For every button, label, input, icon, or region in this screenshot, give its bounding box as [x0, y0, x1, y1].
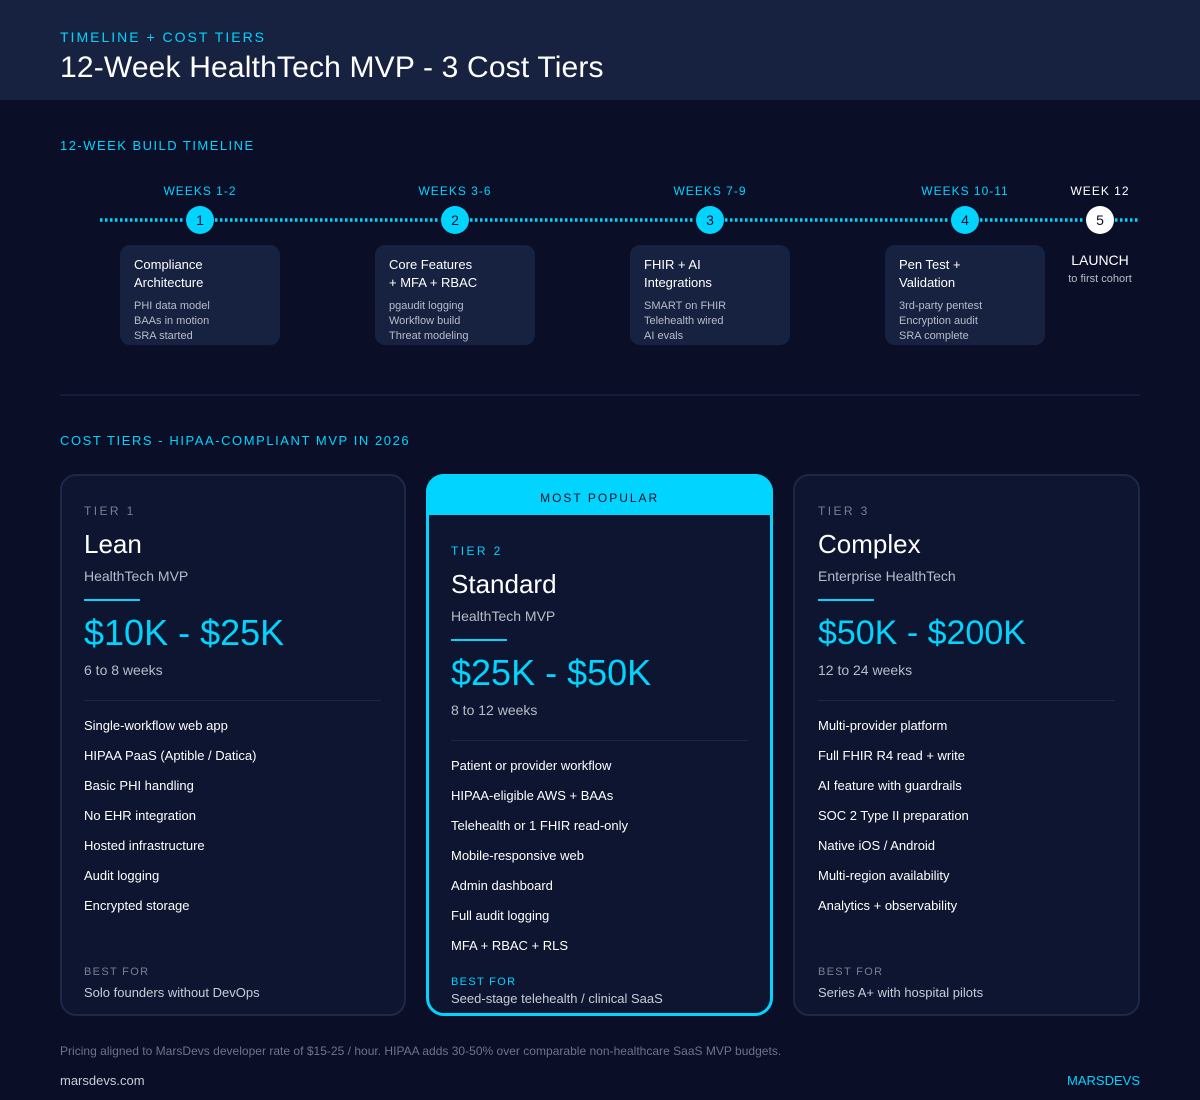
timeline card 3 [630, 245, 790, 345]
node 2: 2 [451, 212, 459, 228]
tier 2 name: Standard [451, 569, 557, 599]
node 2 [441, 206, 469, 234]
node 3: 3 [706, 212, 714, 228]
timeline card 2: Core Features [389, 257, 472, 272]
timeline card 2: pgaudit logging [389, 300, 464, 312]
cost tiers section heading: COST TIERS - HIPAA-COMPLIANT MVP IN 2026 [60, 433, 410, 448]
tier 3 features: SOC 2 Type II preparation [818, 808, 969, 823]
tier 3 features: AI feature with guardrails [818, 778, 962, 793]
timeline card 2: Threat modeling [389, 330, 468, 342]
tier 2 best for [451, 976, 663, 1006]
header eyebrow: TIMELINE + COST TIERS [60, 29, 266, 45]
timeline card 1: Architecture [134, 275, 203, 290]
tier 3 best for [818, 966, 983, 1000]
tier 1 features: Single-workflow web app [84, 718, 228, 733]
tier 3 features: Full FHIR R4 read + write [818, 748, 965, 763]
tier 1 best for [84, 966, 260, 1000]
tier 2 price: $25K - $50K [451, 652, 651, 693]
tier 2 features: HIPAA-eligible AWS + BAAs [451, 788, 613, 803]
footer url: marsdevs.com [60, 1073, 145, 1088]
tier 3 features: Multi-region availability [818, 868, 949, 883]
node 4: 4 [961, 212, 969, 228]
footnote: Pricing aligned to MarsDevs developer rate of $15-25 / hour. HIPAA adds 30-50% over comparable non-healthcare SaaS MVP budgets. [60, 1044, 781, 1058]
panel: tier 2 [426, 474, 773, 1016]
label: weeks 1-2: WEEKS 1-2 [163, 184, 237, 198]
tier 1 features: Hosted infrastructure [84, 838, 205, 853]
timeline card 2: + MFA + RBAC [389, 275, 477, 290]
timeline card 1: PHI data model [134, 300, 210, 312]
tier 2 label: TIER 2 [451, 544, 503, 558]
tier 1 price: $10K - $25K [84, 612, 284, 653]
timeline card 1: BAAs in motion [134, 315, 209, 327]
node 1 [186, 206, 214, 234]
tier 2 features: MFA + RBAC + RLS [451, 938, 568, 953]
tier 2 features: Patient or provider workflow [451, 758, 611, 773]
tier 3 features: Multi-provider platform [818, 718, 947, 733]
tier 2 features: Admin dashboard [451, 878, 553, 893]
timeline: dotted line [100, 218, 1138, 222]
most popular banner: MOST POPULAR [540, 491, 659, 505]
label: weeks 3-6: WEEKS 3-6 [418, 184, 492, 198]
tier 2 best for: BEST FOR [451, 976, 516, 988]
timeline card 3: Telehealth wired [644, 315, 724, 327]
title: 12-Week HealthTech MVP - 3 Cost Tiers [60, 51, 604, 84]
timeline section heading: 12-WEEK BUILD TIMELINE [60, 138, 255, 153]
timeline card 2 [375, 245, 535, 345]
footer brand: MARSDEVS [1067, 1073, 1140, 1088]
tier 3 price: $50K - $200K [818, 614, 1026, 652]
tier 2 duration: 8 to 12 weeks [451, 702, 537, 718]
launch label: LAUNCH [1071, 252, 1129, 268]
tier 1 label: TIER 1 [84, 504, 136, 518]
tier 2 features: Full audit logging [451, 908, 549, 923]
label: weeks 10-11: WEEKS 10-11 [921, 184, 1009, 198]
tier 3 name: Complex [818, 529, 921, 559]
tier 1 features: No EHR integration [84, 808, 196, 823]
timeline card 4: Validation [899, 275, 955, 290]
tier 2 features: Telehealth or 1 FHIR read-only [451, 818, 628, 833]
panel: tier 1 [60, 474, 406, 1016]
tier 1 features: Encrypted storage [84, 898, 190, 913]
launch sublabel: to first cohort [1068, 273, 1132, 285]
tier 1 best for: Solo founders without DevOps [84, 985, 260, 1000]
timeline card 1 [120, 245, 280, 345]
node 1: 1 [196, 212, 204, 228]
timeline card 3: Integrations [644, 275, 712, 290]
timeline card 2: Workflow build [389, 315, 460, 327]
tier 1 duration: 6 to 8 weeks [84, 662, 163, 678]
tier 1 features [84, 718, 256, 913]
label: week 12: WEEK 12 [1070, 184, 1130, 198]
node 5 [1086, 206, 1114, 234]
tier 3 best for: BEST FOR [818, 966, 883, 978]
tier 3 features [818, 718, 969, 913]
timeline card 4: Encryption audit [899, 315, 978, 327]
timeline card 3: SMART on FHIR [644, 300, 726, 312]
node 4 [951, 206, 979, 234]
node 3 [696, 206, 724, 234]
label: weeks 7-9: WEEKS 7-9 [673, 184, 747, 198]
timeline card 3: AI evals [644, 330, 683, 342]
timeline card 1: SRA started [134, 330, 193, 342]
panel: tier 3 [793, 474, 1140, 1016]
tier 1 features: Basic PHI handling [84, 778, 194, 793]
most popular banner [426, 474, 773, 515]
timeline card 4: 3rd-party pentest [899, 300, 982, 312]
tier 3 features: Analytics + observability [818, 898, 957, 913]
tier 1 features: Audit logging [84, 868, 159, 883]
tier 3 duration: 12 to 24 weeks [818, 662, 912, 678]
tier 2 best for: Seed-stage telehealth / clinical SaaS [451, 991, 663, 1006]
timeline card 4: SRA complete [899, 330, 969, 342]
timeline card 1: Compliance [134, 257, 203, 272]
tier 1 subtitle: HealthTech MVP [84, 568, 188, 584]
tier 1 name: Lean [84, 529, 142, 559]
tier 1 features: HIPAA PaaS (Aptible / Datica) [84, 748, 256, 763]
timeline card 4: Pen Test + [899, 257, 961, 272]
tier 3 best for: Series A+ with hospital pilots [818, 985, 983, 1000]
tier 3 subtitle: Enterprise HealthTech [818, 568, 956, 584]
tier 1 best for: BEST FOR [84, 966, 149, 978]
header band [0, 0, 1200, 100]
tier 2 features [451, 758, 628, 953]
tier 2 subtitle: HealthTech MVP [451, 608, 555, 624]
tier 3 label: TIER 3 [818, 504, 870, 518]
node 5: 5 [1096, 212, 1104, 228]
tier 3 features: Native iOS / Android [818, 838, 935, 853]
timeline card 4 [885, 245, 1045, 345]
timeline card 3: FHIR + AI [644, 257, 701, 272]
tier 2 features: Mobile-responsive web [451, 848, 584, 863]
